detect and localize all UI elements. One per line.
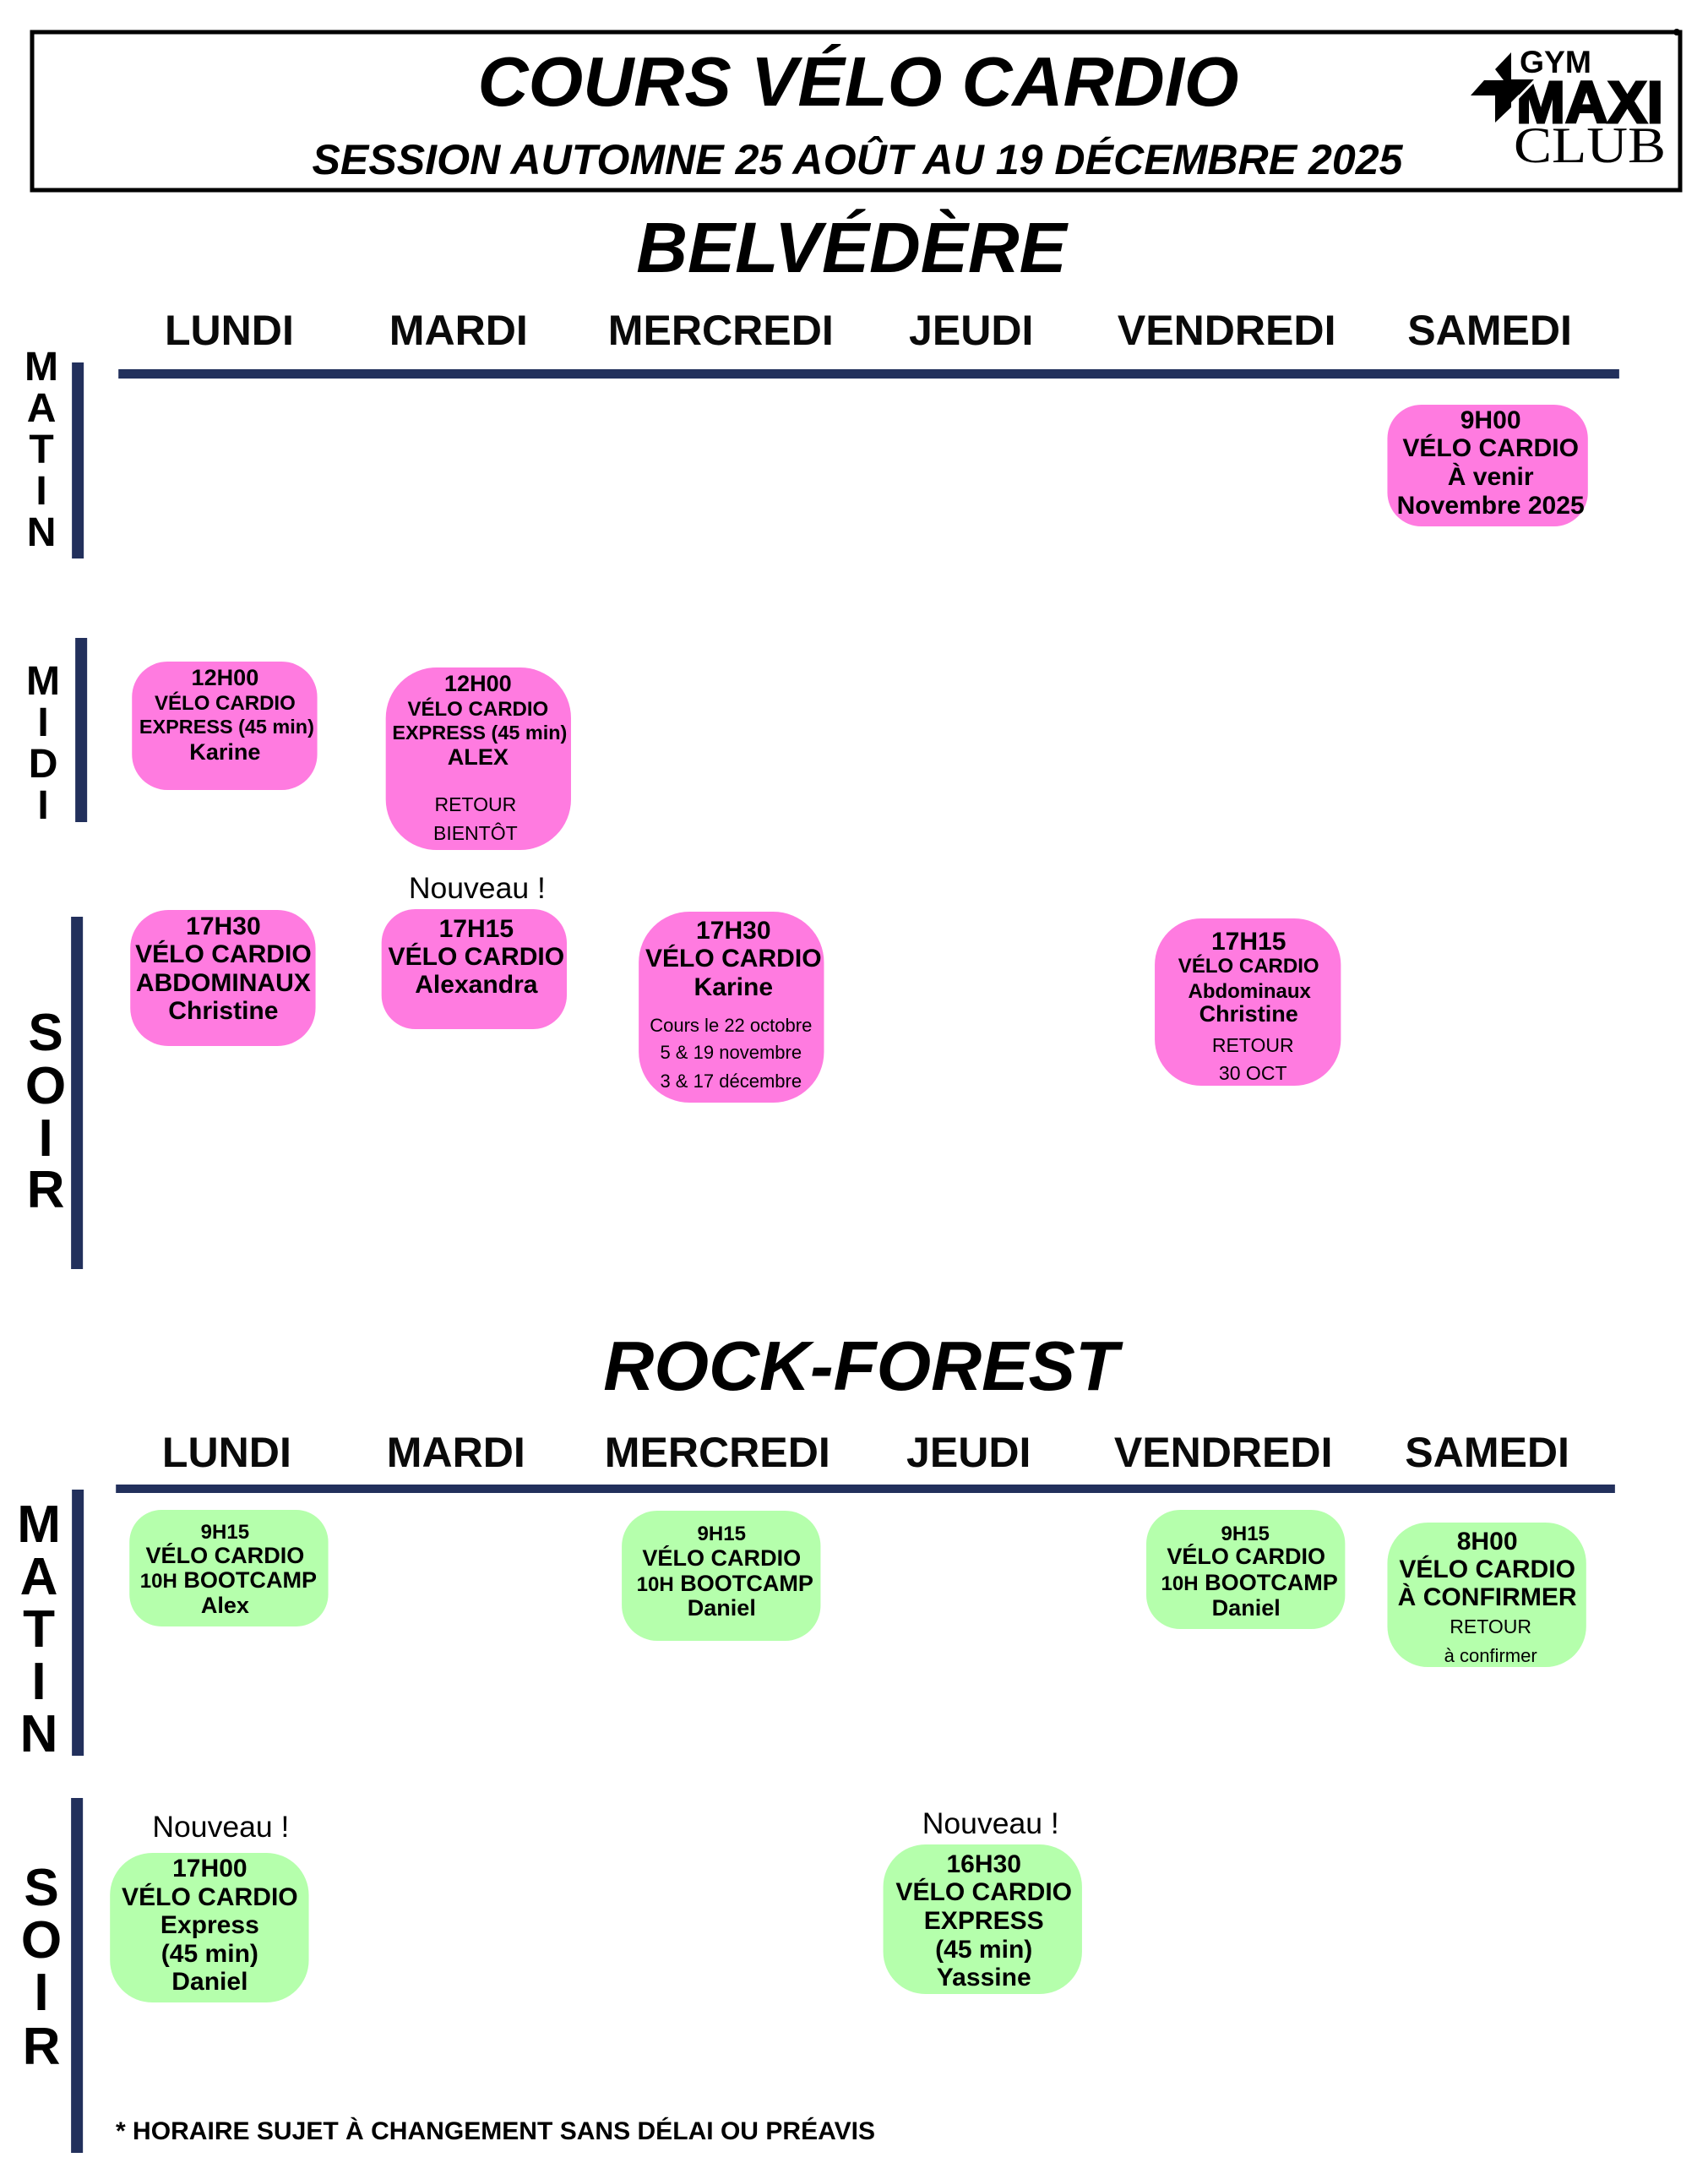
card: mercredi matin 9H15: 9H15 — [698, 1523, 746, 1545]
card: lundi matin 9H15: 10H BOOTCAMP — [140, 1567, 317, 1593]
row label: Midi: I — [37, 783, 49, 828]
card: jeudi soir 16H30: VÉLO CARDIO — [895, 1877, 1072, 1906]
card: mardi midi 12H00: ALEX — [448, 744, 509, 770]
card: mardi soir 17H15: Alexandra — [415, 971, 538, 999]
card: mardi midi 12H00: RETOUR — [434, 793, 516, 815]
card: lundi midi 12H00: VÉLO CARDIO — [155, 691, 296, 715]
card: vendredi soir 17H15: 17H15 — [1211, 928, 1286, 956]
card: vendredi soir 17H15: Abdominaux — [1188, 980, 1312, 1003]
header panel — [32, 29, 1680, 190]
day headers: MERCREDI — [605, 1429, 830, 1476]
day header rule — [116, 1485, 1615, 1493]
card: lundi matin 9H15: Alex — [201, 1593, 249, 1618]
card: mercredi matin 9H15 — [622, 1511, 820, 1641]
card: samedi matin 8H00: RETOUR — [1450, 1615, 1531, 1637]
section: Belvédère — [24, 208, 1619, 1269]
row label: Soir — [21, 1798, 83, 2153]
card: mercredi soir 17H30: Cours le 22 octobre — [650, 1015, 812, 1036]
day headers: LUNDI — [162, 1429, 291, 1476]
row label: Matin: A — [20, 1548, 57, 1606]
day headers: JEUDI — [909, 307, 1033, 354]
card: mercredi soir 17H30: Karine — [694, 973, 773, 1001]
card: vendredi soir 17H15: Christine — [1199, 1001, 1298, 1027]
day headers: SAMEDI — [1407, 307, 1572, 354]
row label: Matin: N — [27, 510, 56, 555]
card: lundi soir 17H00: VÉLO CARDIO — [122, 1882, 298, 1911]
card: samedi matin 8H00: à confirmer — [1444, 1645, 1537, 1666]
row label: Matin — [17, 1490, 84, 1763]
card: samedi matin 8H00: À CONFIRMER — [1398, 1583, 1577, 1611]
card: vendredi soir 17H15 — [1155, 918, 1341, 1086]
card: lundi midi 12H00: EXPRESS (45 min) — [139, 716, 314, 738]
card: lundi soir 17H30: 17H30 — [186, 913, 261, 940]
card: lundi soir 17H30 — [130, 910, 316, 1046]
card: mercredi soir 17H30: 5 & 19 novembre — [660, 1042, 802, 1063]
card: lundi soir 17H00: 17H00 — [172, 1855, 247, 1882]
day headers: LUNDI — [165, 307, 294, 354]
note: nouveau mardi: Nouveau ! — [409, 871, 546, 905]
row label: Matin: A — [27, 386, 56, 431]
card: jeudi soir 16H30: EXPRESS — [924, 1907, 1044, 1935]
card: vendredi soir 17H15: RETOUR — [1212, 1034, 1294, 1056]
card: mardi midi 12H00: 12H00 — [444, 671, 512, 696]
logo: Gym Maxi Club — [1471, 45, 1666, 173]
row label: Soir: R — [23, 2018, 60, 2076]
title: COURS VÉLO CARDIO — [478, 42, 1238, 121]
card: mardi soir 17H15: VÉLO CARDIO — [389, 942, 564, 971]
day headers: VENDREDI — [1118, 307, 1336, 354]
row label: Soir: I — [34, 1964, 49, 2022]
card: mercredi matin 9H15: Daniel — [688, 1595, 756, 1621]
row label: Midi: M — [26, 659, 60, 704]
card: lundi soir 17H00 — [110, 1853, 309, 2002]
day headers: MARDI — [389, 307, 528, 354]
card: lundi midi 12H00: 12H00 — [192, 665, 258, 690]
logo: Gym Maxi Club: MAXI — [1516, 69, 1663, 135]
day headers: MERCREDI — [608, 307, 834, 354]
row label: Soir: S — [28, 1004, 63, 1062]
card: lundi soir 17H00: Daniel — [171, 1968, 247, 1996]
footnote: * HORAIRE SUJET À CHANGEMENT SANS DÉLAI OU PRÉAVIS — [116, 2117, 875, 2145]
row label: Matin: N — [20, 1705, 57, 1763]
row label: Soir — [25, 917, 83, 1269]
row label: Matin: T — [29, 428, 54, 472]
day headers — [162, 1429, 1569, 1476]
row label: Matin: M — [17, 1496, 61, 1554]
card: mercredi soir 17H30: VÉLO CARDIO — [645, 944, 822, 973]
logo: Gym Maxi Club: CLUB — [1514, 117, 1666, 173]
card: mardi midi 12H00: BIENTÔT — [433, 821, 518, 844]
card: mercredi soir 17H30: 17H30 — [696, 917, 771, 945]
card: vendredi matin 9H15: Daniel — [1212, 1595, 1281, 1621]
note: nouveau jeudi: Nouveau ! — [922, 1806, 1059, 1840]
row label: Matin: I — [31, 1653, 46, 1711]
row label: Matin: I — [35, 469, 47, 514]
row label: Soir: S — [24, 1859, 59, 1917]
card: mardi midi 12H00 — [386, 667, 571, 850]
day headers — [165, 307, 1572, 354]
day headers: VENDREDI — [1114, 1429, 1333, 1476]
row label: Soir: I — [38, 1109, 53, 1168]
card: samedi matin 8H00: VÉLO CARDIO — [1399, 1555, 1575, 1583]
subtitle: SESSION AUTOMNE 25 AOÛT AU 19 DÉCEMBRE 2025 — [313, 135, 1404, 183]
card: mardi midi 12H00: EXPRESS (45 min) — [392, 722, 567, 744]
card: samedi matin 8H00: 8H00 — [1457, 1528, 1518, 1556]
card: lundi midi 12H00: Karine — [189, 739, 260, 765]
day headers: JEUDI — [906, 1429, 1031, 1476]
card: lundi matin 9H15: VÉLO CARDIO — [146, 1542, 304, 1568]
card: lundi soir 17H30: VÉLO CARDIO — [135, 940, 312, 968]
row label: Matin: M — [24, 345, 58, 390]
logo: Gym Maxi Club: GYM — [1520, 45, 1591, 79]
section: Rock-Forest — [17, 1327, 1615, 2153]
card: mardi soir 17H15 — [382, 909, 567, 1029]
day headers: MARDI — [387, 1429, 525, 1476]
card: mercredi soir 17H30 — [639, 912, 824, 1103]
card: jeudi soir 16H30: 16H30 — [946, 1850, 1021, 1878]
card: samedi 9H00: À venir — [1448, 462, 1534, 491]
row label: Matin — [24, 345, 84, 558]
card: vendredi soir 17H15: VÉLO CARDIO — [1178, 954, 1319, 978]
card: samedi matin 8H00 — [1387, 1523, 1586, 1667]
header frame — [32, 32, 1680, 190]
row label: Matin: T — [23, 1600, 55, 1659]
card: mardi soir 17H15: 17H15 — [439, 915, 514, 943]
card: jeudi soir 16H30: Yassine — [937, 1964, 1031, 1991]
heading: Rock-Forest: ROCK-FOREST — [603, 1327, 1123, 1405]
card: jeudi soir 16H30 — [884, 1844, 1082, 1994]
card: lundi soir 17H30: ABDOMINAUX — [136, 969, 311, 997]
day header rule — [118, 369, 1619, 379]
row label: Soir: O — [21, 1911, 62, 1970]
row label: Midi: I — [37, 700, 49, 745]
day headers: SAMEDI — [1405, 1429, 1569, 1476]
card: vendredi matin 9H15: 10H BOOTCAMP — [1161, 1570, 1338, 1595]
card: lundi midi 12H00 — [132, 662, 318, 790]
card: lundi soir 17H00: (45 min) — [161, 1940, 258, 1968]
card: jeudi soir 16H30: (45 min) — [935, 1936, 1032, 1964]
card: vendredi soir 17H15: 30 OCT — [1219, 1062, 1287, 1084]
card: mercredi soir 17H30: 3 & 17 décembre — [660, 1071, 802, 1092]
row label: Midi: D — [29, 742, 57, 787]
card: vendredi matin 9H15: 9H15 — [1221, 1523, 1270, 1545]
card: lundi soir 17H30: Christine — [168, 997, 278, 1025]
row label: Soir: O — [25, 1057, 66, 1115]
card: vendredi matin 9H15 — [1146, 1510, 1345, 1629]
card: samedi 9H00: Novembre 2025 — [1397, 492, 1585, 520]
card: mercredi matin 9H15: 10H BOOTCAMP — [637, 1571, 813, 1596]
card: mardi midi 12H00: VÉLO CARDIO — [407, 697, 548, 721]
card: samedi 9H00: 9H00 — [1461, 406, 1521, 434]
card: lundi matin 9H15 — [129, 1510, 329, 1626]
card: samedi 9H00: VÉLO CARDIO — [1402, 433, 1579, 462]
card: lundi matin 9H15: 9H15 — [201, 1521, 249, 1544]
card: samedi 9H00 — [1387, 405, 1588, 526]
card: vendredi matin 9H15: VÉLO CARDIO — [1167, 1543, 1325, 1569]
note: nouveau lundi: Nouveau ! — [152, 1810, 289, 1844]
card: mercredi matin 9H15: VÉLO CARDIO — [642, 1545, 801, 1571]
card: lundi soir 17H00: Express — [160, 1911, 259, 1939]
row label: Midi — [26, 638, 87, 828]
row label: Soir: R — [27, 1161, 65, 1219]
heading: Belvédère: BELVÉDÈRE — [636, 208, 1069, 287]
